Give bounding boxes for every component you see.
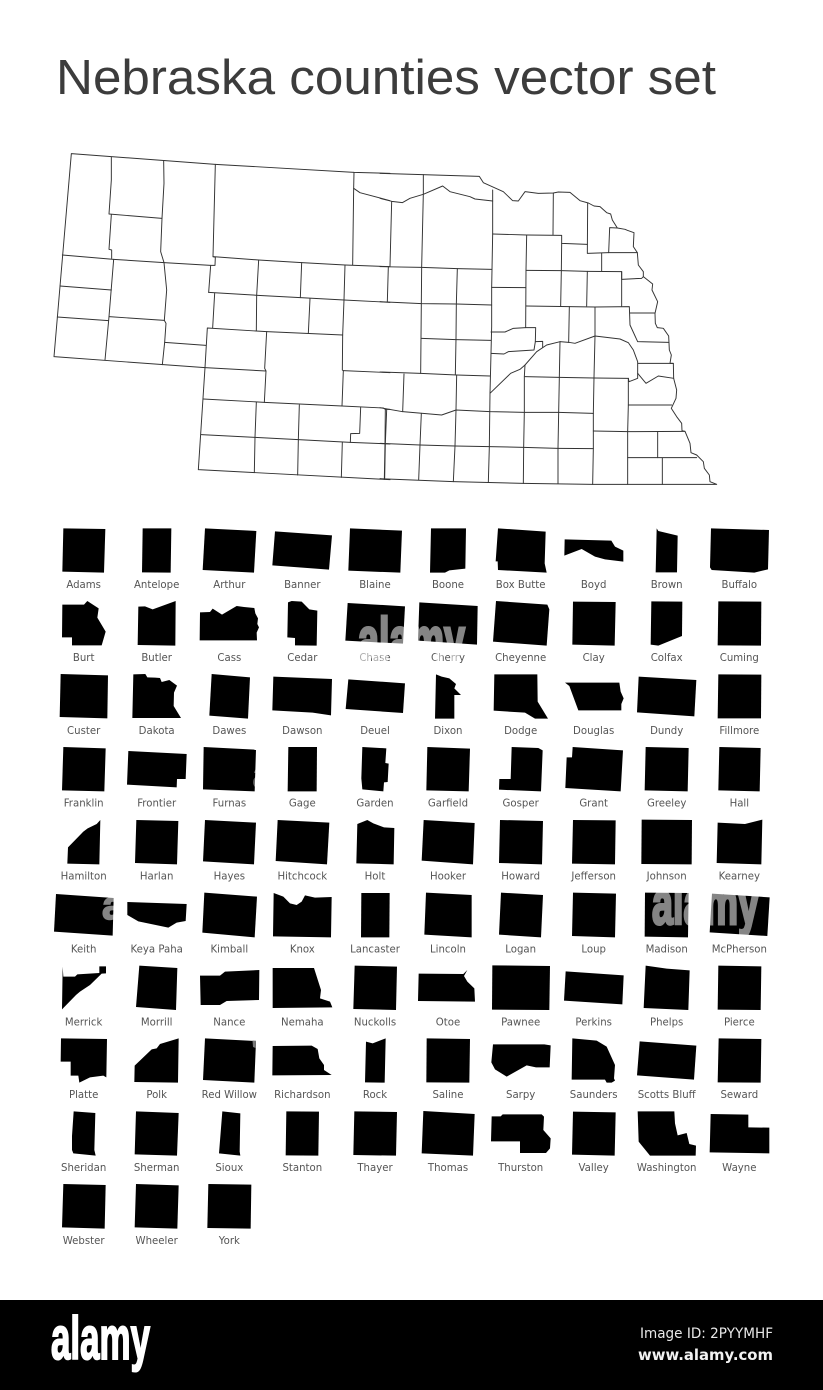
county: Boyd: Boyd <box>581 580 606 591</box>
county grid: rows 4 to 7, right columns <box>418 747 770 1028</box>
county: McPherson <box>710 894 770 955</box>
county: Knox <box>273 893 332 955</box>
county: Dodge: Dodge <box>504 726 537 737</box>
county: Thurston <box>491 1114 551 1174</box>
county: Garden: Garden <box>356 799 394 810</box>
county: Kimball: Kimball <box>210 944 248 955</box>
county grid: rows 1 to 3, left columns <box>60 528 405 737</box>
county: Franklin <box>62 747 106 810</box>
county: Greeley <box>645 747 689 810</box>
county: Arthur <box>203 528 256 591</box>
county: Nance: Nance <box>213 1017 245 1028</box>
county: Keith: Keith <box>71 944 96 955</box>
footer url: www.alamy.com <box>638 1346 773 1364</box>
county: Valley: Valley <box>579 1163 609 1174</box>
county: Hitchcock <box>276 820 329 883</box>
county: Dawson: Dawson <box>282 726 322 737</box>
county: Keya Paha: Keya Paha <box>130 944 183 955</box>
county: Arthur: Arthur <box>213 580 246 591</box>
county: Jefferson <box>570 820 616 883</box>
county: Wayne <box>710 1114 769 1174</box>
county: Loup: Loup <box>581 944 606 955</box>
county grid: rows 4 to 7, left columns <box>54 747 401 1028</box>
county: Butler: Butler <box>141 653 173 664</box>
county: Furnas: Furnas <box>212 799 246 810</box>
watermark: corner on Red Willow <box>252 1040 256 1048</box>
county: Butler <box>138 601 176 664</box>
county: Brown: Brown <box>651 580 683 591</box>
county: Sioux <box>215 1111 243 1174</box>
county: Sheridan <box>61 1111 106 1174</box>
county: Dodge <box>494 674 548 737</box>
county: Howard: Howard <box>501 872 540 883</box>
county: Lancaster: Lancaster <box>350 944 401 955</box>
county: Holt: Holt <box>365 872 385 883</box>
county: Lancaster <box>350 893 401 955</box>
county: York <box>207 1184 251 1247</box>
county: York: York <box>218 1236 240 1247</box>
county: Washington: Washington <box>637 1163 697 1174</box>
footer image id: Image ID: 2PYYMHF <box>640 1325 773 1342</box>
county: Polk: Polk <box>146 1090 167 1101</box>
county: Thomas <box>422 1111 475 1174</box>
county: Boone <box>430 528 466 591</box>
county: Box Butte: Box Butte <box>496 580 546 591</box>
county: Platte: Platte <box>69 1090 98 1101</box>
county: Nuckolls: Nuckolls <box>354 1017 396 1028</box>
county: Antelope <box>134 528 179 591</box>
county: Dundy: Dundy <box>650 726 683 737</box>
county: Harlan <box>135 820 178 883</box>
county: Adams: Adams <box>66 580 101 591</box>
county: Franklin: Franklin <box>64 799 104 810</box>
county: Garden <box>356 747 394 810</box>
county: Richardson <box>272 1046 332 1101</box>
county: Sherman <box>134 1111 180 1174</box>
county: Cass <box>200 606 259 664</box>
county: Gosper <box>499 747 543 810</box>
county: Seward <box>718 1038 761 1101</box>
watermark: letter on Keith: a <box>102 884 125 928</box>
county: Cuming: Cuming <box>720 653 759 664</box>
county: Morrill <box>136 966 177 1028</box>
county: Washington <box>637 1111 697 1174</box>
county: Nuckolls <box>353 966 397 1028</box>
county: Rock: Rock <box>363 1090 387 1101</box>
county: Cedar <box>287 601 318 664</box>
county: Pawnee: Pawnee <box>501 1017 540 1028</box>
county: Hitchcock: Hitchcock <box>277 872 327 883</box>
county: Dundy <box>637 677 696 737</box>
county: Perkins <box>564 971 624 1028</box>
county: Burt: Burt <box>73 653 94 664</box>
county: Hayes: Hayes <box>214 872 245 883</box>
county: Burt <box>62 601 106 664</box>
county: Webster <box>62 1184 106 1247</box>
county: Chase <box>345 603 405 664</box>
county: Logan: Logan <box>505 944 536 955</box>
county: Scotts Bluff: Scotts Bluff <box>638 1090 697 1101</box>
county: Greeley: Greeley <box>647 799 686 810</box>
county: Hayes <box>203 820 256 883</box>
county: Hooker <box>422 820 475 883</box>
county: Cass: Cass <box>217 653 241 664</box>
county: Clay: Clay <box>583 653 605 664</box>
county: Antelope: Antelope <box>134 580 179 591</box>
county: Sioux: Sioux <box>215 1163 243 1174</box>
county: Sheridan: Sheridan <box>61 1163 106 1174</box>
county: Perkins: Perkins <box>575 1017 612 1028</box>
county: Dixon: Dixon <box>433 726 462 737</box>
county: Lincoln: Lincoln <box>430 944 466 955</box>
county: Boyd <box>564 539 623 591</box>
county: Frontier <box>127 751 187 810</box>
county: Webster: Webster <box>63 1236 105 1247</box>
county: Sarpy: Sarpy <box>506 1090 535 1101</box>
county: Gosper: Gosper <box>503 799 540 810</box>
county: Colfax <box>651 601 683 664</box>
county: Boone: Boone <box>432 580 464 591</box>
county: Saunders: Saunders <box>570 1090 618 1101</box>
county: Scotts Bluff <box>637 1041 697 1101</box>
watermark: alamy over Chase and Cherry: alamy <box>358 606 465 673</box>
county: Platte <box>61 1038 107 1101</box>
county: Thayer <box>353 1111 397 1174</box>
county: Thurston: Thurston <box>497 1163 543 1174</box>
county: Knox: Knox <box>290 944 315 955</box>
county: Dawes <box>209 674 250 737</box>
county: Banner <box>272 531 332 591</box>
county: Morrill: Morrill <box>141 1017 172 1028</box>
title: Nebraska counties vector set <box>56 51 716 105</box>
county: Kimball <box>202 893 257 955</box>
county: Buffalo: Buffalo <box>721 580 757 591</box>
county: Cherry <box>418 602 478 664</box>
county: Phelps: Phelps <box>650 1017 683 1028</box>
county: Jefferson: Jefferson <box>570 872 616 883</box>
map: Nebraska county outlines <box>54 154 717 484</box>
county: Fillmore: Fillmore <box>719 726 759 737</box>
county: Cedar: Cedar <box>287 653 318 664</box>
county: McPherson: McPherson <box>712 944 767 955</box>
county: Keya Paha <box>127 902 187 955</box>
county: Fillmore <box>718 674 761 737</box>
county: Gage <box>288 747 317 810</box>
county: Stanton <box>282 1111 322 1174</box>
county: Pawnee <box>492 965 550 1028</box>
county: Cheyenne: Cheyenne <box>495 653 546 664</box>
county: Grant <box>565 747 623 810</box>
footer logo: alamy: alamy <box>51 1305 150 1372</box>
county: Cheyenne <box>493 601 549 664</box>
county: Deuel <box>346 679 405 737</box>
county: Kearney <box>717 820 762 883</box>
county: Thomas: Thomas <box>427 1163 468 1174</box>
county: Saunders <box>570 1038 618 1101</box>
county: Polk <box>134 1038 179 1101</box>
county: Hall: Hall <box>730 799 749 810</box>
county grid: rows 1 to 3, right columns <box>418 528 769 737</box>
county: Saline <box>426 1038 470 1101</box>
county: Madison <box>645 893 689 955</box>
county: Madison: Madison <box>646 944 688 955</box>
county: Holt <box>356 820 394 883</box>
county: Brown <box>651 528 683 591</box>
county: Douglas <box>565 683 624 737</box>
county: Dixon <box>433 674 462 737</box>
county: Garfield <box>426 747 470 810</box>
county: Thayer: Thayer <box>356 1163 393 1174</box>
county: Richardson: Richardson <box>274 1090 331 1101</box>
footer bar <box>0 1300 823 1390</box>
county: Gage: Gage <box>289 799 316 810</box>
county: Valley <box>572 1112 616 1174</box>
county: Banner: Banner <box>284 580 321 591</box>
county: Cuming <box>718 601 761 664</box>
county: Hamilton: Hamilton <box>61 872 107 883</box>
county: Otoe: Otoe <box>436 1017 460 1028</box>
county: Blaine <box>348 528 402 591</box>
county: Frontier: Frontier <box>137 799 177 810</box>
county: Sherman: Sherman <box>134 1163 180 1174</box>
county: Furnas <box>203 747 256 810</box>
county: Johnson: Johnson <box>646 872 687 883</box>
county: Phelps <box>644 966 690 1028</box>
county: Logan <box>499 893 543 955</box>
county: Sarpy <box>491 1044 551 1101</box>
county: Merrick: Merrick <box>65 1017 103 1028</box>
county: Colfax: Colfax <box>651 653 683 664</box>
county grid: rows 8 and 9, right columns <box>422 1038 769 1174</box>
county: Seward: Seward <box>720 1090 758 1101</box>
county: Blaine: Blaine <box>359 580 391 591</box>
county: Chase: Chase <box>359 653 391 664</box>
county: Custer <box>60 674 108 737</box>
county grid: rows 8 to 10, left columns <box>61 1038 397 1247</box>
watermark: alamy over Madison and McPherson: alamy <box>652 870 759 937</box>
county: Hall <box>718 747 761 810</box>
county: Red Willow <box>202 1038 257 1101</box>
county: Douglas: Douglas <box>573 726 614 737</box>
county: Hamilton <box>61 820 107 883</box>
county: Box Butte <box>496 528 547 591</box>
county: Pierce <box>718 966 761 1028</box>
county: Nance <box>200 970 259 1028</box>
county: Harlan: Harlan <box>140 872 173 883</box>
watermark: letter on Furnas: a <box>252 753 275 797</box>
county: Red Willow: Red Willow <box>202 1090 257 1101</box>
county: Nemaha: Nemaha <box>281 1017 324 1028</box>
county: Saline: Saline <box>432 1090 463 1101</box>
county: Kearney: Kearney <box>719 872 760 883</box>
county: Howard <box>499 820 543 883</box>
county: Grant: Grant <box>579 799 608 810</box>
county: Rock <box>363 1038 387 1101</box>
county: Buffalo <box>710 528 769 591</box>
county: Hooker: Hooker <box>430 872 467 883</box>
county: Pierce: Pierce <box>724 1017 755 1028</box>
county: Custer: Custer <box>67 726 101 737</box>
county: Garfield: Garfield <box>428 799 468 810</box>
county: Deuel: Deuel <box>360 726 390 737</box>
county: Cherry: Cherry <box>431 653 465 664</box>
county: Dakota <box>132 674 181 737</box>
county: Clay <box>572 602 616 664</box>
county: Wayne: Wayne <box>722 1163 756 1174</box>
county: Loup <box>572 893 616 955</box>
county: Nemaha <box>273 968 332 1028</box>
county: Dawson <box>272 677 332 737</box>
county: Wheeler: Wheeler <box>136 1236 179 1247</box>
county: Lincoln <box>424 893 472 955</box>
county: Dawes: Dawes <box>212 726 246 737</box>
county: Wheeler <box>135 1184 179 1247</box>
county: Dakota: Dakota <box>139 726 175 737</box>
county: Adams <box>62 528 105 591</box>
county: Stanton: Stanton <box>282 1163 322 1174</box>
county: Otoe <box>418 970 475 1028</box>
county: Johnson <box>641 820 692 883</box>
county: Keith <box>54 894 114 955</box>
county: Merrick <box>62 966 106 1028</box>
